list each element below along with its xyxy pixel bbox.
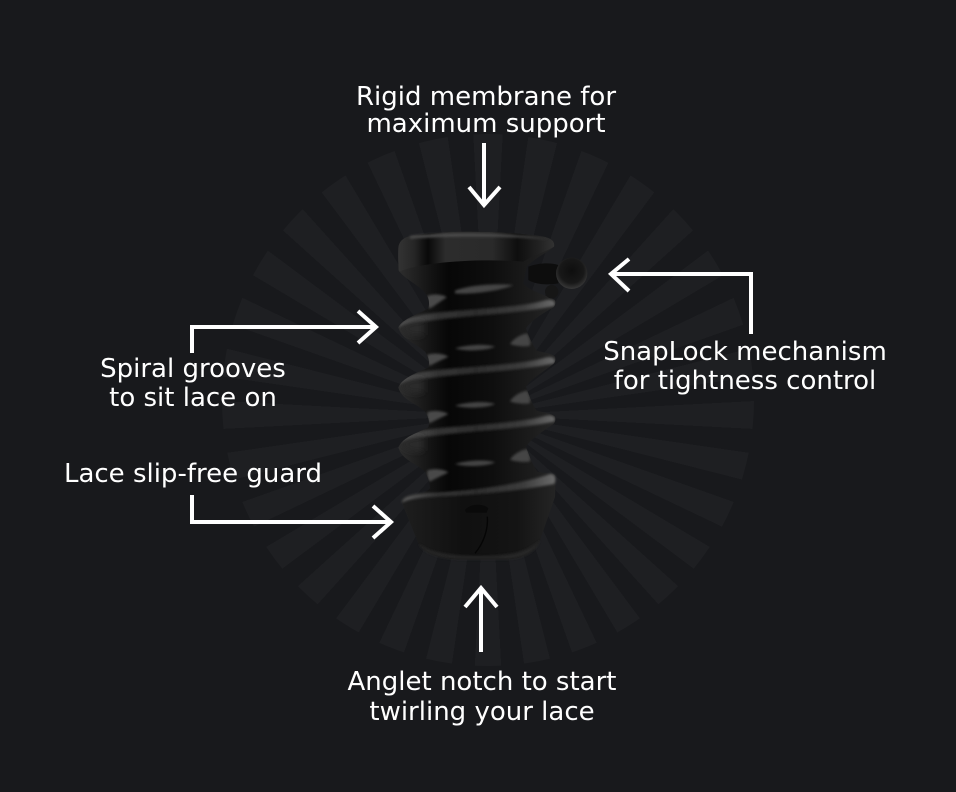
base (402, 474, 555, 559)
label: rigid membrane: Rigid membrane for (356, 82, 616, 112)
label: snaplock: for tightness control (614, 366, 876, 396)
arrow: to angled notch (465, 588, 497, 652)
top cap (398, 232, 554, 272)
sunburst rays background (222, 134, 754, 666)
arrow: to snaplock (611, 259, 751, 334)
label: anglet notch: twirling your lace (369, 697, 595, 727)
label: spiral grooves: Spiral grooves (100, 354, 286, 384)
arrow: to membrane (469, 143, 500, 205)
label: slip-free guard: Lace slip-free guard (64, 459, 322, 489)
product: lace spool (393, 230, 587, 563)
arrow: to slip-free guard (192, 495, 391, 538)
spiral ring 3 (398, 415, 555, 482)
snaplock knob (528, 258, 587, 298)
spiral ring 2 (398, 357, 555, 423)
arrow: to spiral grooves (192, 311, 376, 353)
spool silhouette (398, 251, 556, 492)
label: spiral grooves: to sit lace on (109, 383, 277, 413)
label: rigid membrane: maximum support (366, 109, 606, 139)
spool body (398, 251, 556, 492)
label: anglet notch: Anglet notch to start (348, 667, 616, 697)
label: snaplock: SnapLock mechanism (603, 337, 887, 367)
neck highlights (427, 284, 513, 309)
spiral ring 1 (398, 300, 555, 366)
